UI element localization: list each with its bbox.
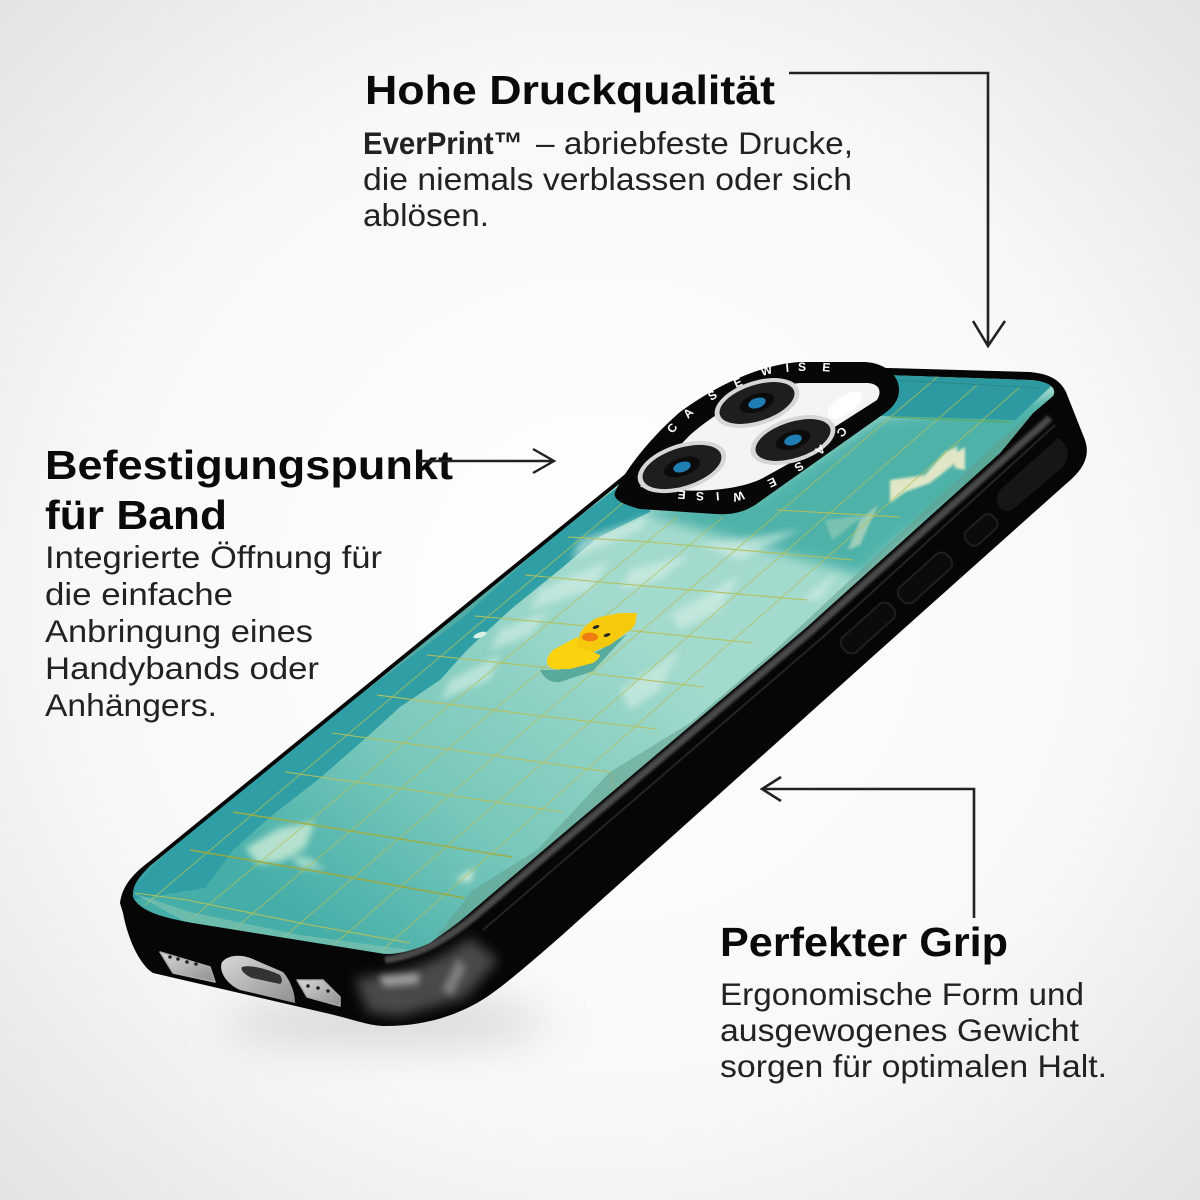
dark water top right bbox=[880, 375, 1052, 420]
text block bbox=[720, 976, 1107, 1084]
text block: die niemals verblassen oder sich bbox=[363, 161, 852, 197]
phone in case bbox=[100, 350, 1100, 1026]
bump lettering top: CASEWISE bbox=[664, 360, 831, 436]
side buttons bbox=[838, 438, 1068, 657]
pool glint bbox=[473, 632, 487, 638]
callout: Befestigungspunkt für Band bbox=[45, 442, 453, 723]
tile grid bbox=[135, 372, 1040, 952]
arrow: to lanyard point bbox=[420, 449, 554, 473]
phone shadow bbox=[220, 998, 550, 1046]
text block: Ergonomische Form und bbox=[720, 976, 1084, 1012]
camera bump bbox=[615, 360, 899, 514]
heading: Hohe Druckqualität bbox=[365, 67, 775, 113]
text block: – abriebfeste Drucke, bbox=[536, 125, 853, 161]
water caustics lower left bbox=[245, 822, 475, 882]
bottom speaker right bbox=[297, 980, 340, 1006]
duck shadow bbox=[540, 634, 627, 682]
left bevel bbox=[134, 549, 539, 888]
lens left bbox=[631, 431, 733, 503]
lens top bbox=[708, 368, 806, 438]
heading: für Band bbox=[45, 492, 227, 538]
water streaks bbox=[440, 515, 840, 710]
camera window bbox=[640, 383, 880, 491]
text block: Integrierte Öffnung für bbox=[45, 539, 382, 575]
text block: EverPrint™ bbox=[363, 125, 523, 161]
duck head bbox=[577, 613, 637, 652]
arrow: to case side bbox=[762, 777, 974, 918]
heading: Perfekter Grip bbox=[720, 919, 1008, 965]
bottom bevel bbox=[133, 893, 410, 958]
water upper right bbox=[640, 395, 1070, 575]
text block: Anhängers. bbox=[45, 687, 217, 723]
text block: ausgewogenes Gewicht bbox=[720, 1012, 1079, 1048]
callout: Perfekter Grip bbox=[720, 919, 1107, 1084]
arrow: to case top bbox=[789, 73, 1005, 346]
text block: Anbringung eines bbox=[45, 613, 313, 649]
splash top right bbox=[825, 446, 965, 550]
text block: sorgen für optimalen Halt. bbox=[720, 1048, 1107, 1084]
duck body bbox=[547, 637, 600, 669]
text block: Handybands oder bbox=[45, 650, 319, 686]
right bevel bbox=[430, 413, 1033, 945]
heading bbox=[45, 442, 453, 538]
heading: Befestigungspunkt bbox=[45, 442, 453, 488]
callout: Hohe Druckqualität bbox=[363, 67, 853, 233]
dark water left strip bbox=[130, 455, 660, 900]
case corner reflection bbox=[355, 418, 1055, 1016]
text block bbox=[45, 539, 382, 723]
text block: ablösen. bbox=[363, 197, 489, 233]
text block bbox=[363, 125, 853, 233]
beak bbox=[582, 632, 598, 642]
eyes bbox=[592, 624, 600, 630]
bottom speaker left bbox=[160, 952, 215, 982]
rubber duck bbox=[540, 613, 637, 682]
printed pool screen bbox=[132, 375, 1054, 954]
lens right bbox=[744, 405, 842, 475]
bump lettering bottom: CASEWISE bbox=[677, 424, 850, 505]
text block: die einfache bbox=[45, 576, 233, 612]
case body bbox=[120, 365, 1087, 1026]
charging port bbox=[221, 956, 295, 1003]
